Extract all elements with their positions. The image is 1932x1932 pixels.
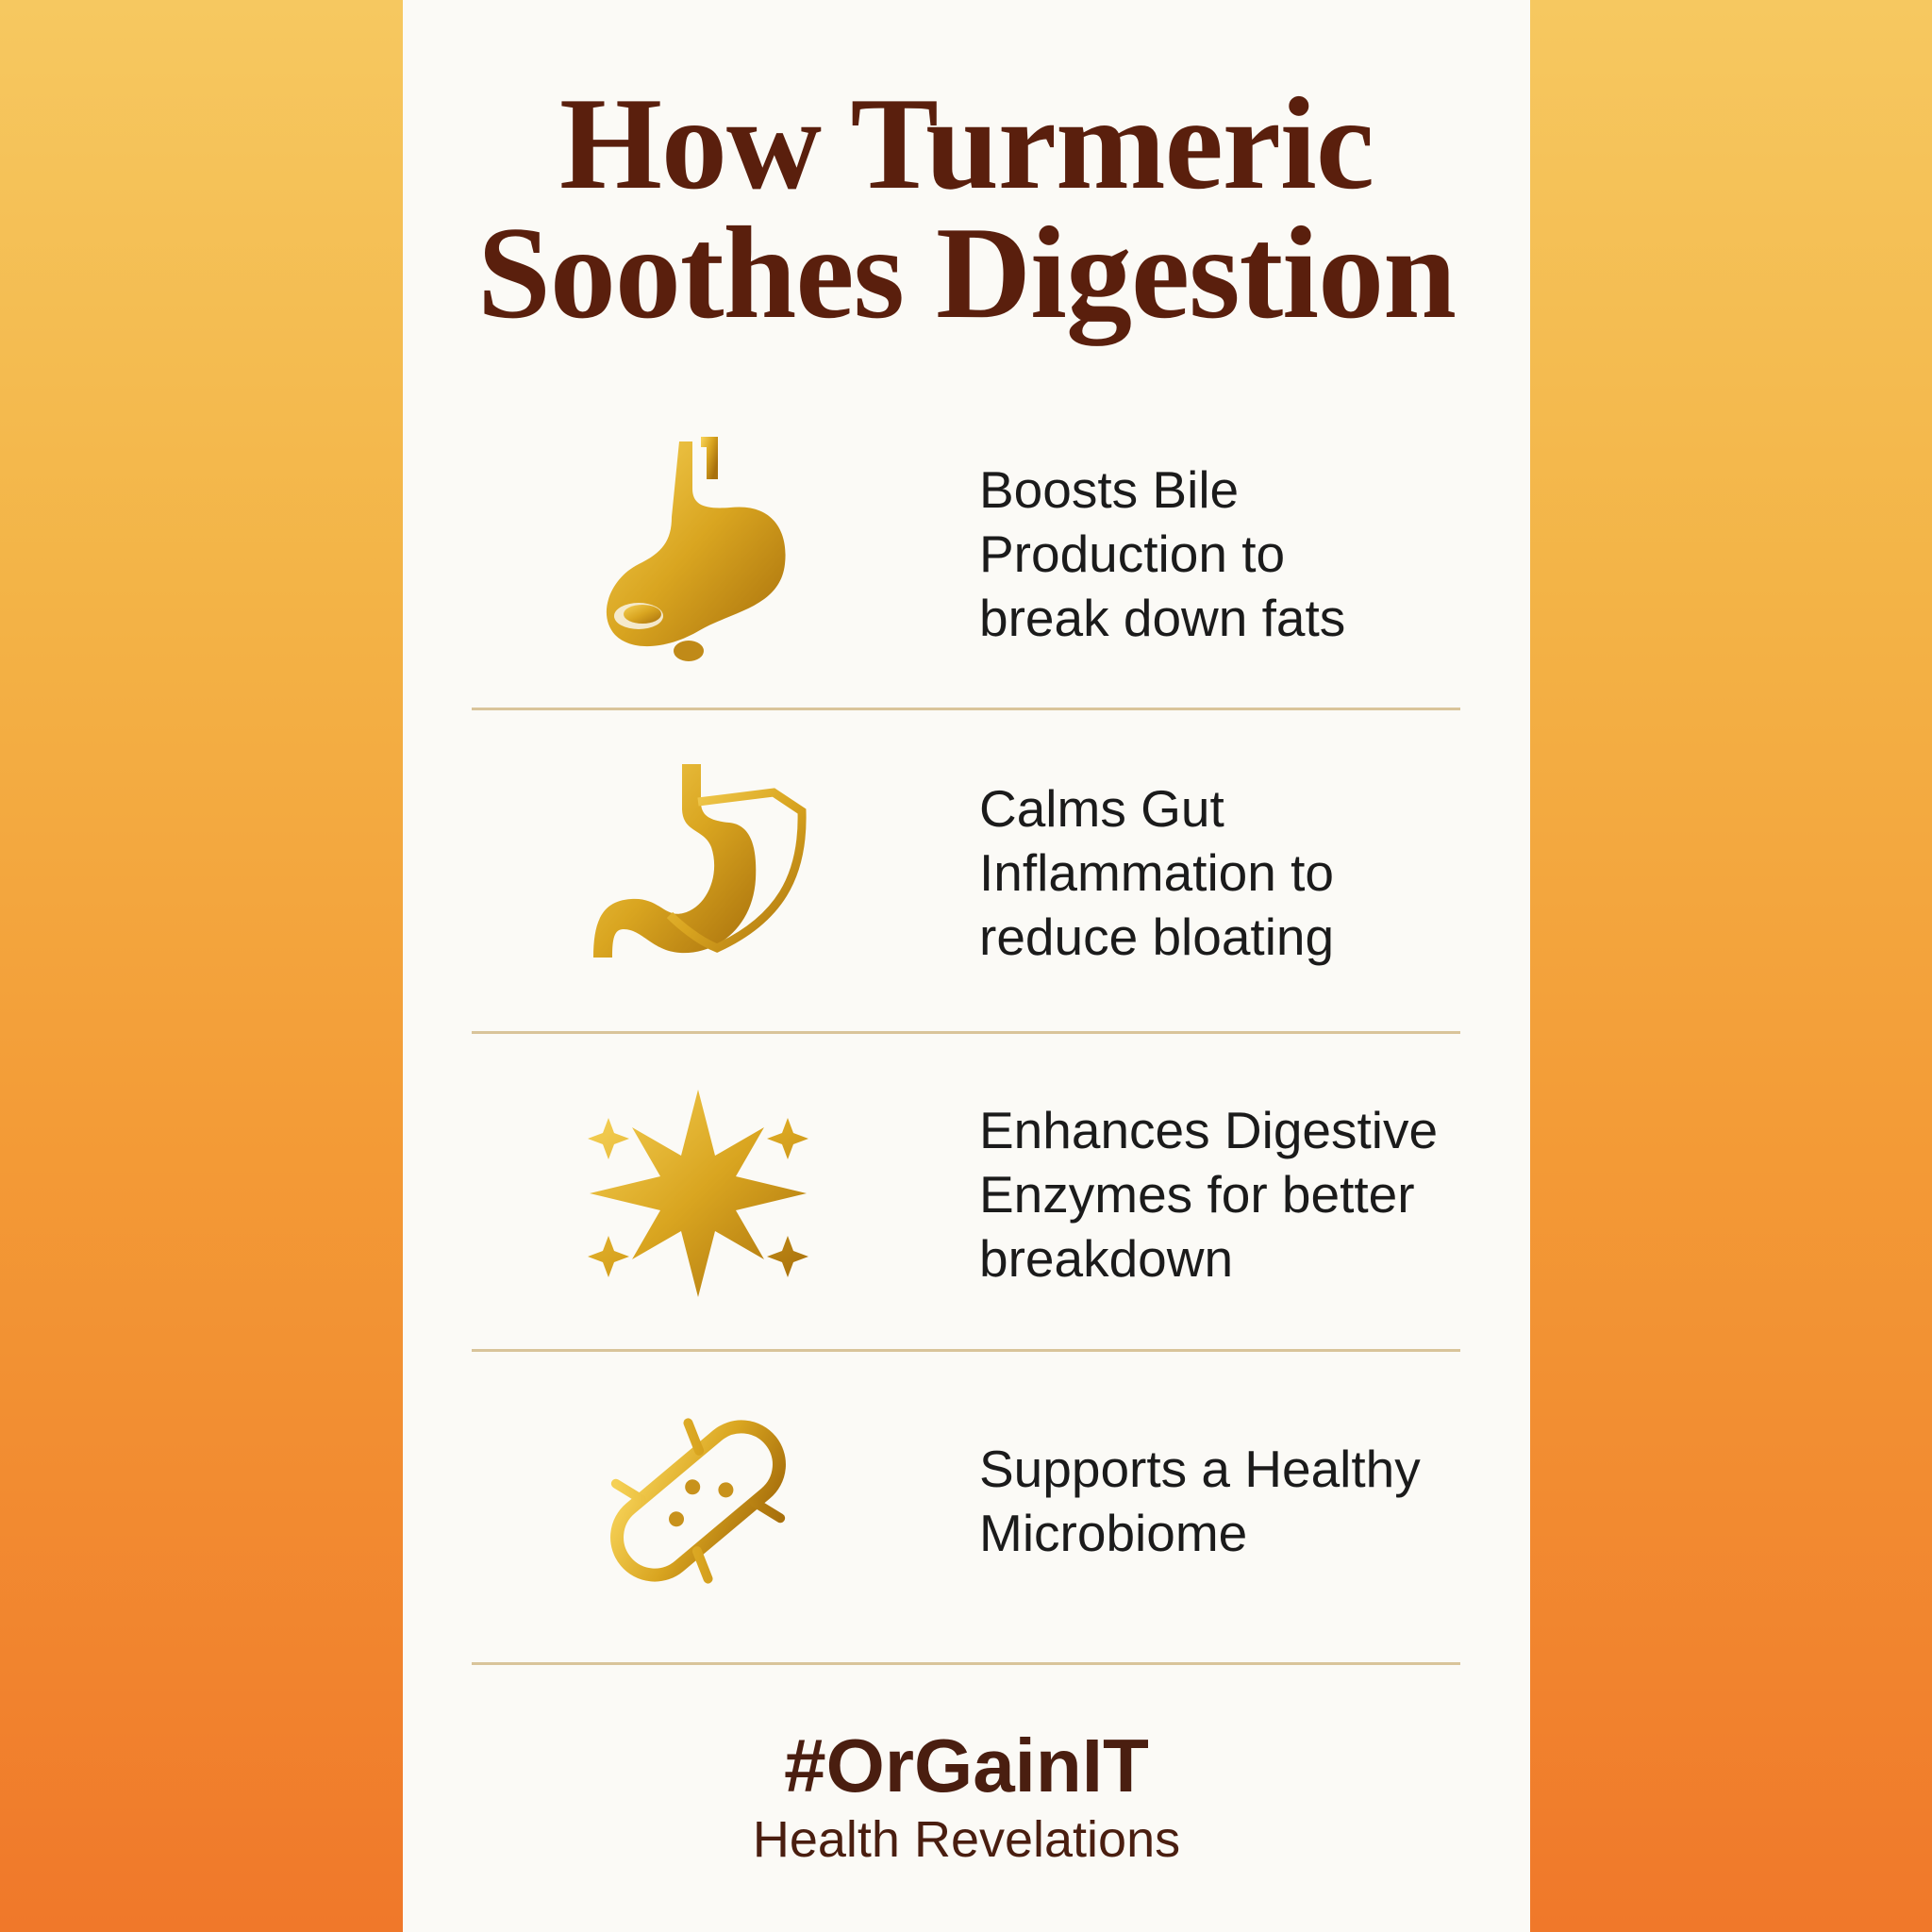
footer subtitle: Health Revelations — [753, 1811, 1180, 1868]
text: inflammation: reduce bloating — [979, 908, 1334, 966]
title — [477, 71, 1456, 346]
title: How Turmeric — [559, 71, 1374, 217]
icon: microbe — [610, 1418, 786, 1584]
text: inflammation — [979, 779, 1334, 966]
text: inflammation: Inflammation to — [979, 843, 1334, 902]
text: microbiome — [979, 1440, 1421, 1562]
text: inflammation: Calms Gut — [979, 779, 1224, 838]
text: microbiome: Microbiome — [979, 1504, 1247, 1562]
text: bile — [979, 460, 1345, 647]
icon: stomach shield — [593, 764, 807, 958]
background panel — [403, 0, 1530, 1932]
text: enzymes: Enhances Digestive — [979, 1101, 1438, 1159]
text: bile: Boosts Bile — [979, 460, 1239, 519]
title: Soothes Digestion — [477, 200, 1456, 346]
text: bile: Production to — [979, 525, 1285, 583]
text: microbiome: Supports a Healthy — [979, 1440, 1421, 1498]
icon: sparkle enzymes — [588, 1090, 808, 1297]
icon: stomach with bile — [606, 437, 786, 661]
text: enzymes — [979, 1101, 1438, 1288]
footer hashtag: #OrGainIT — [784, 1724, 1149, 1807]
text: enzymes: breakdown — [979, 1229, 1233, 1288]
text: bile: break down fats — [979, 589, 1345, 647]
text: enzymes: Enzymes for better — [979, 1165, 1415, 1224]
